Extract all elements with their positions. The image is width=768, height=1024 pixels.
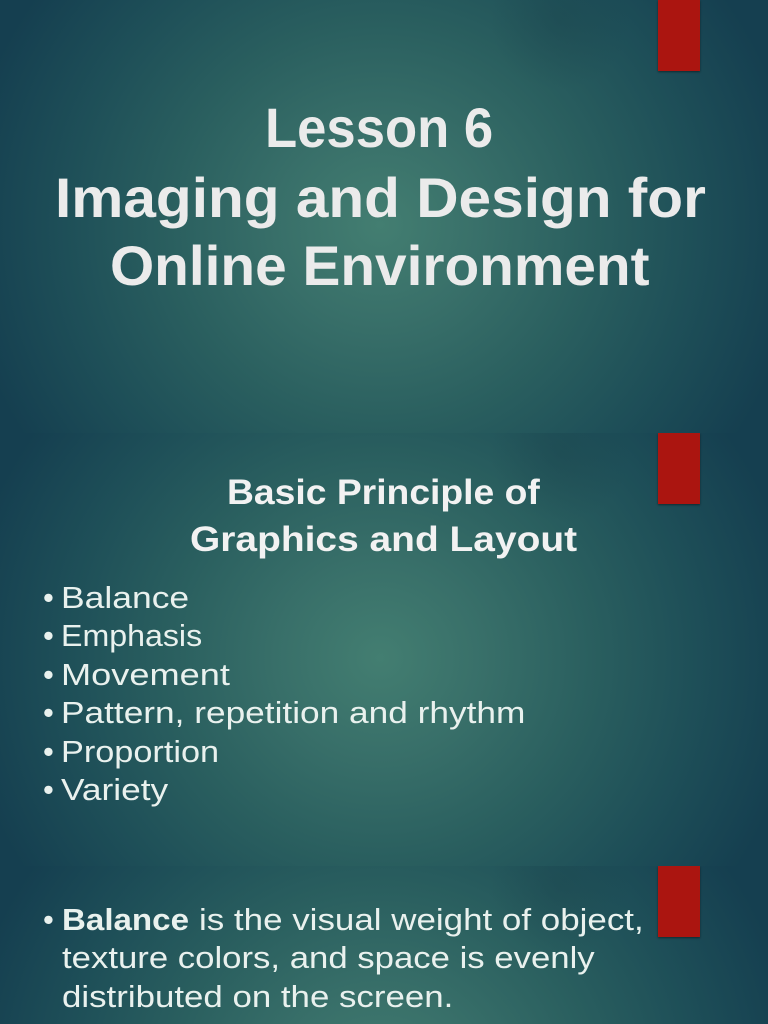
heading: Basic Principle of — [227, 473, 540, 512]
title — [54, 96, 706, 297]
panel: slide 2 — [0, 433, 768, 866]
bullet list: Variety — [61, 772, 168, 807]
heading — [190, 473, 577, 559]
bullet list: • — [43, 695, 54, 730]
text block: balance definition: Balance — [62, 902, 189, 937]
bullet list: • — [43, 657, 54, 692]
bullet list: • — [43, 580, 54, 615]
title: Imaging and Design for — [54, 166, 705, 229]
title: Lesson 6 — [265, 96, 493, 159]
bullet list: Movement — [61, 657, 230, 692]
bullet list: • — [43, 734, 54, 769]
text block: balance definition: distributed on the screen. — [62, 979, 453, 1014]
title: Online Environment — [110, 234, 649, 297]
panel: slide 1 — [0, 0, 768, 433]
bullet list: Proportion — [61, 734, 219, 769]
bullet list: Pattern, repetition and rhythm — [61, 695, 525, 730]
bullet list: • — [43, 772, 54, 807]
panel: slide 3 — [0, 866, 768, 1024]
icon: red tab slide 2 — [658, 433, 700, 504]
bullet list: Emphasis — [61, 618, 202, 653]
bullet list: Balance — [61, 580, 189, 615]
icon: red tab slide 1 — [658, 0, 700, 71]
bullet list: • — [43, 618, 54, 653]
icon: red tab slide 3 — [658, 866, 700, 937]
bullet list — [43, 580, 525, 807]
text block: balance definition: is the visual weight of object, — [199, 902, 644, 937]
heading: Graphics and Layout — [190, 520, 577, 559]
text block: balance definition: texture colors, and space is evenly — [62, 940, 594, 975]
text block: balance definition: • — [43, 902, 54, 937]
text block: balance definition — [43, 902, 644, 1014]
